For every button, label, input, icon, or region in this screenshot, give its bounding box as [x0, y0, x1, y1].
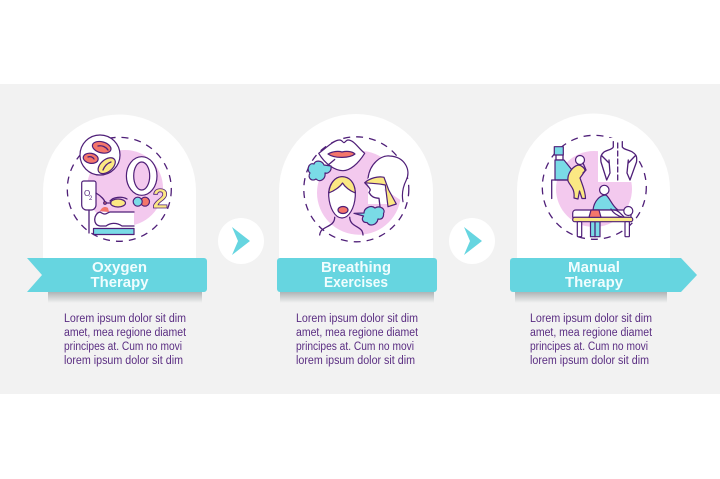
background panel: [0, 84, 720, 394]
heading: oxygen therapy: Oxygen: [92, 259, 147, 276]
icon: oxygen therapy: O: [84, 189, 90, 198]
card: breathing arch: [279, 114, 433, 262]
text block: breathing exercises: Lorem ipsum dolor sit dim: [296, 313, 418, 325]
icon: oxygen therapy: 2: [89, 196, 93, 202]
icon: breathing exercises: [304, 137, 409, 242]
panel: oxygen therapy: [27, 114, 207, 367]
banner: manual therapy: [510, 258, 697, 292]
text block: oxygen therapy: Lorem ipsum dolor sit dim: [64, 313, 186, 325]
arrow: first to second: [218, 218, 264, 264]
heading: breathing exercises: Breathing: [321, 259, 391, 276]
banner shadow: [280, 292, 434, 303]
heading: manual therapy: [565, 259, 624, 291]
card: manual arch: [517, 114, 670, 262]
text block: manual therapy: [530, 313, 653, 367]
panel: manual therapy: [510, 114, 697, 367]
text block: oxygen therapy: amet, mea regione diamet: [64, 327, 187, 339]
arrow: second to third: [449, 218, 495, 264]
heading: breathing exercises: [321, 259, 391, 291]
heading: oxygen therapy: Therapy: [90, 274, 149, 291]
text block: oxygen therapy: principes at. Cum no movi: [64, 341, 182, 353]
text block: breathing exercises: [296, 313, 419, 367]
heading: manual therapy: Manual: [568, 259, 620, 276]
icon: manual therapy: [542, 135, 646, 239]
text block: oxygen therapy: [64, 313, 187, 367]
banner: oxygen therapy: [27, 258, 207, 292]
banner shadow: [515, 292, 667, 303]
heading: breathing exercises: Exercises: [324, 274, 388, 291]
heading: oxygen therapy: [90, 259, 149, 291]
text block: breathing exercises: principes at. Cum no movi: [296, 341, 414, 353]
text block: manual therapy: amet, mea regione diamet: [530, 327, 653, 339]
heading: manual therapy: Therapy: [565, 274, 624, 291]
panel: breathing exercises: [277, 114, 437, 367]
card: oxygen arch: [43, 114, 196, 262]
banner shadow: [48, 292, 202, 303]
text block: oxygen therapy: lorem ipsum dolor sit dim: [64, 355, 183, 367]
text block: manual therapy: principes at. Cum no movi: [530, 341, 648, 353]
text block: manual therapy: Lorem ipsum dolor sit dim: [530, 313, 652, 325]
text block: breathing exercises: amet, mea regione diamet: [296, 327, 419, 339]
banner: breathing exercises: [277, 258, 437, 292]
text block: manual therapy: lorem ipsum dolor sit dim: [530, 355, 649, 367]
icon: oxygen therapy: [67, 135, 171, 241]
back figure: [601, 142, 637, 180]
icon: oxygen therapy: 2: [152, 183, 168, 214]
text block: breathing exercises: lorem ipsum dolor sit dim: [296, 355, 415, 367]
